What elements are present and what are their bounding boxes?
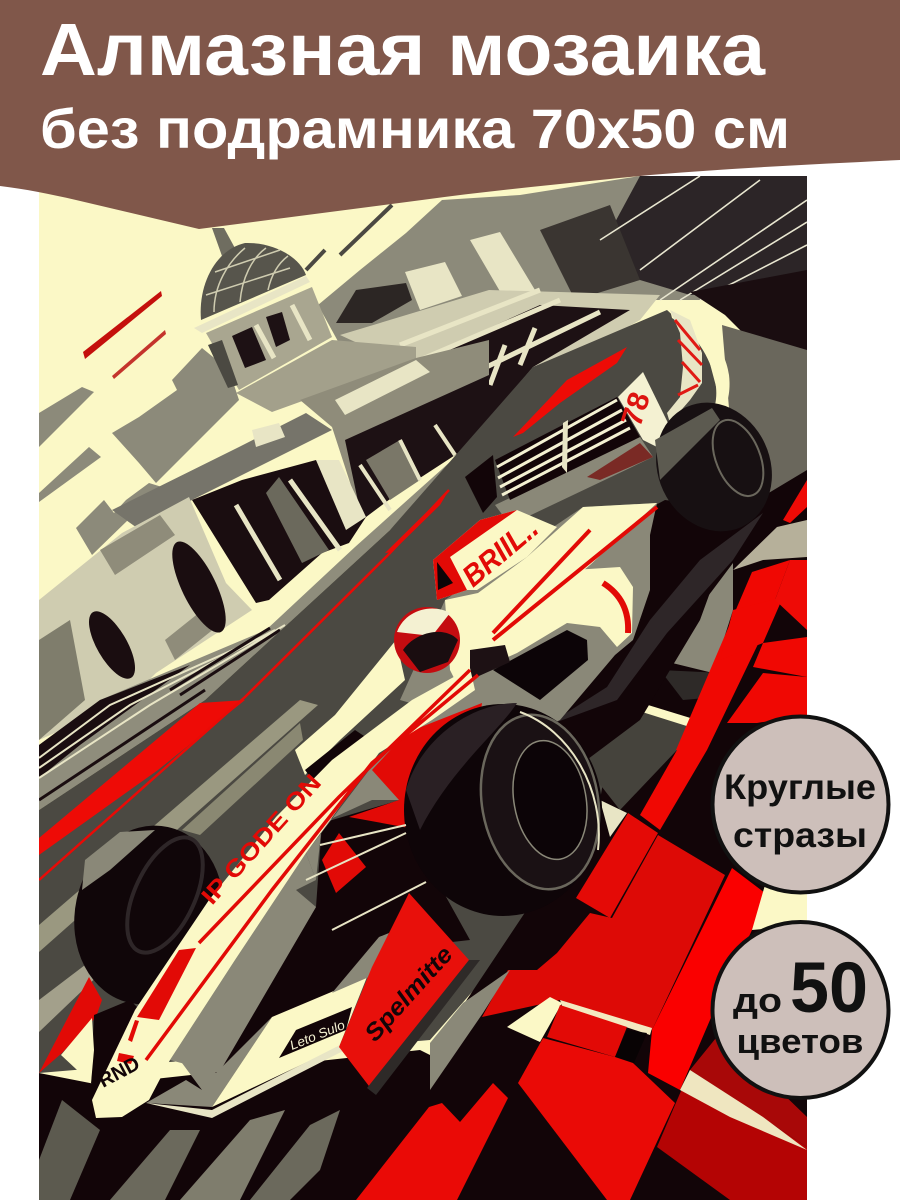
domed building xyxy=(39,228,489,740)
car nose: IP GODE ON xyxy=(196,769,327,910)
badge: up to 50 colours: цветов xyxy=(736,1023,864,1061)
badge: round rhinestones: Круглые xyxy=(724,768,876,807)
cockpit side xyxy=(295,640,510,790)
badge: up to 50 colours: до xyxy=(733,982,782,1020)
front wing xyxy=(39,893,480,1118)
rear wing xyxy=(465,372,668,525)
rear suspension xyxy=(557,500,763,758)
suspension arms xyxy=(306,825,426,930)
panel: racing car artwork xyxy=(39,176,807,1200)
sky strokes xyxy=(39,205,392,555)
front wing: Spelmitte xyxy=(359,941,458,1047)
car nose: RND xyxy=(95,1053,144,1092)
lower left ground xyxy=(39,1050,440,1200)
city skyline xyxy=(318,176,807,430)
car body xyxy=(400,503,657,735)
abstract red blocks xyxy=(356,470,807,1200)
badge: up to 50 colours xyxy=(712,922,888,1098)
front wing: Leto Sulo xyxy=(288,1017,347,1053)
race track xyxy=(39,270,807,1073)
header banner xyxy=(0,0,900,229)
trackside railings xyxy=(39,462,450,810)
front right wheel xyxy=(404,703,612,916)
badge: round rhinestones: стразы xyxy=(733,816,867,855)
black floor under car xyxy=(215,800,470,1080)
title: Алмазная мозаика xyxy=(40,8,766,91)
rear wing: 78 xyxy=(615,388,657,430)
badge: up to 50 colours: 50 xyxy=(790,949,868,1028)
driver helmet xyxy=(394,607,460,673)
badge: round rhinestones xyxy=(712,716,888,892)
front left wheel xyxy=(74,826,220,1004)
subtitle: без подрамника 70х50 см xyxy=(40,97,790,160)
car nose xyxy=(92,668,482,1118)
rear wheel xyxy=(655,402,772,531)
car body: BRIIL.. xyxy=(456,512,545,593)
